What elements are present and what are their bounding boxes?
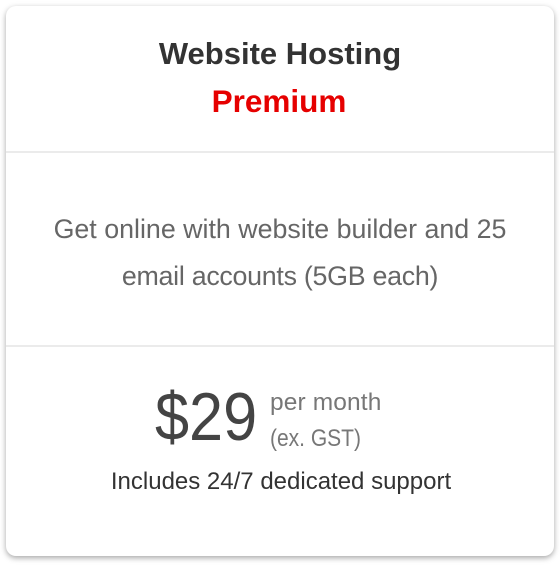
description text — [54, 214, 506, 291]
description text: email accounts (5GB each) — [122, 261, 438, 291]
support note: Includes 24/7 dedicated support — [111, 468, 451, 495]
price period — [270, 389, 381, 452]
subtitle: plan name: Premium — [212, 83, 346, 119]
price period: (ex. GST) — [270, 425, 361, 452]
description text: Get online with website builder and 25 — [54, 214, 506, 244]
title: Website Hosting — [159, 36, 401, 71]
price: $29 — [155, 379, 257, 455]
price period: per month — [270, 389, 381, 416]
